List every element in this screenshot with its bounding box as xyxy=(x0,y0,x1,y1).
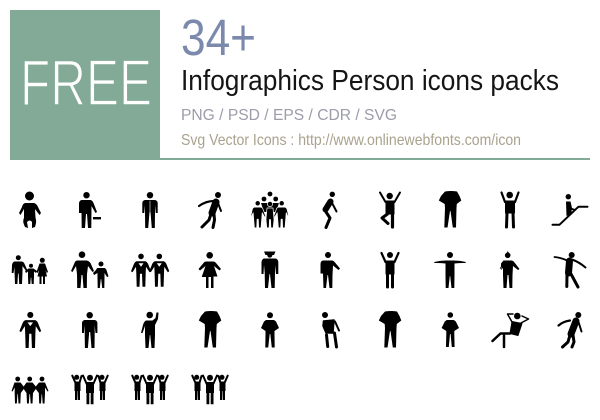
icon: person arms raised xyxy=(502,192,518,227)
icon: baby xyxy=(19,192,41,228)
icon: girl in dress xyxy=(198,252,221,288)
icon: man in suit xyxy=(142,192,158,228)
icon: tree pose xyxy=(380,192,400,227)
icon: broad torso hands on hips, second xyxy=(199,311,221,348)
icon: man with minus sign xyxy=(79,192,101,228)
icon: person one arm out xyxy=(320,252,340,288)
icon: person walking xyxy=(558,312,582,347)
icon: crowd of people xyxy=(251,192,289,228)
icon: person slouching xyxy=(322,312,339,347)
icon: person hands on hips xyxy=(261,312,279,348)
panel: FREE badge xyxy=(10,10,160,160)
icon: person waving xyxy=(141,312,158,348)
icon: person arms outstretched xyxy=(434,252,466,288)
icon: broad torso hands on hips xyxy=(439,191,461,228)
file formats: PNG / PSD / EPS / CDR / SVG xyxy=(181,107,397,124)
icon: person leaning arms out xyxy=(554,252,586,287)
icon: three people cheering xyxy=(72,375,108,404)
icon: three people cheering, second xyxy=(132,375,168,404)
icon: person with heart xyxy=(19,312,41,348)
person with heart, right xyxy=(149,254,169,287)
icon: person reclining xyxy=(492,313,528,347)
icon: person with knee raised xyxy=(326,192,336,228)
icon: person holding object xyxy=(500,251,520,288)
icon: three people holding hands xyxy=(12,377,48,404)
panel: FREE badge: FREE xyxy=(20,46,152,119)
icon: family of three xyxy=(12,255,48,284)
icon: parent and child xyxy=(71,251,108,288)
header banner xyxy=(10,9,590,160)
icon: standing man xyxy=(82,312,97,348)
icon: three people cheering, third xyxy=(192,375,228,404)
icon: police officer xyxy=(262,252,278,288)
icon: two people with hearts xyxy=(131,254,169,287)
header rule xyxy=(160,158,590,160)
icon grid xyxy=(12,191,588,404)
person with heart, left xyxy=(131,254,151,287)
count heading: 34+ xyxy=(181,9,256,66)
icon: slim person hands on hips xyxy=(442,312,459,347)
icon: broad torso hands on hips, third xyxy=(379,311,401,348)
icon: person on escalator xyxy=(552,194,588,225)
icon: person arms up xyxy=(382,252,398,287)
title: Infographics Person icons packs xyxy=(181,65,559,97)
icon: person stumbling xyxy=(199,192,221,228)
source line: Svg Vector Icons : http://www.onlinewebfonts.com/icon xyxy=(181,132,521,149)
